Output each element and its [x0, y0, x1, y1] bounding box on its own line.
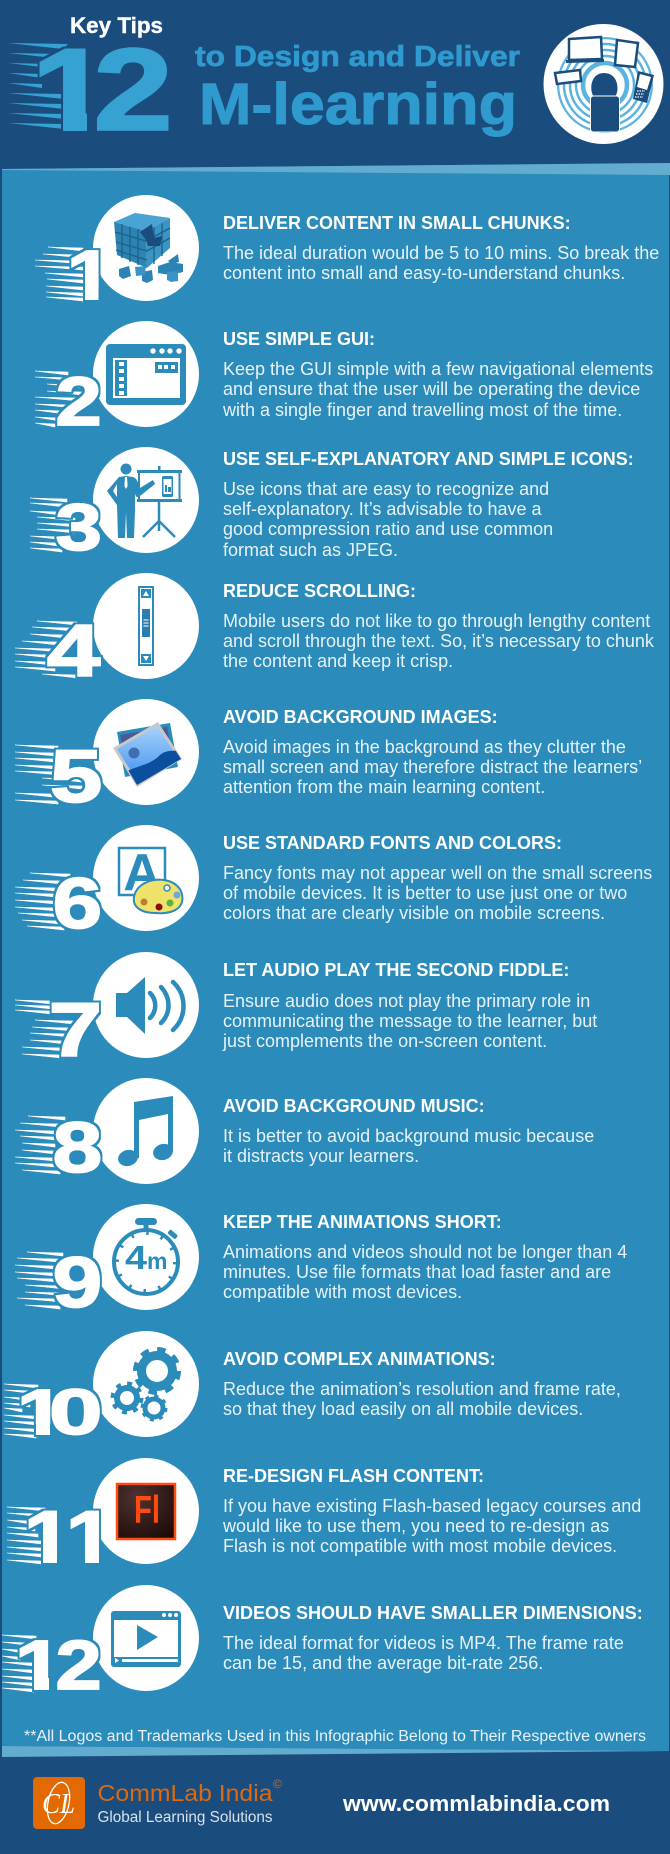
- number 6: 6: [53, 865, 102, 944]
- speed lines 12: [2, 1635, 36, 1692]
- tip 5: [15, 699, 641, 805]
- tip 11: [7, 1458, 640, 1564]
- heading 7: LET AUDIO PLAY THE SECOND FIDDLE:: [223, 960, 569, 980]
- icon: Flash logo: Fl: [134, 1489, 160, 1532]
- heading numeral 12: 2: [94, 24, 173, 155]
- speed lines 7: [15, 1000, 74, 1058]
- text 4: the content and keep it crisp.: [223, 651, 453, 671]
- heading numeral 12: 1: [31, 24, 111, 155]
- text 10: so that they load easily on all mobile devices.: [223, 1399, 583, 1419]
- number 1: 1: [67, 236, 113, 314]
- tip 3: [30, 447, 634, 564]
- laptop: [566, 37, 604, 63]
- heading 4: REDUCE SCROLLING:: [223, 581, 416, 601]
- heading numeral 12: [38, 46, 168, 131]
- icon: cube of blocks: [114, 213, 183, 283]
- icon: learner with devices: [544, 24, 664, 144]
- icon: stopwatch 4m: [114, 1218, 178, 1294]
- disclaimer note: **All Logos and Trademarks Used in this Infographic Belong to Their Respective owners: [24, 1728, 646, 1745]
- icon circle 4: [93, 573, 199, 679]
- text 12: The ideal format for videos is MP4. The frame rate: [223, 1633, 624, 1653]
- icon circle 7: [93, 952, 199, 1058]
- text 4: Mobile users do not like to go through lengthy content: [223, 611, 650, 631]
- text 7: Ensure audio does not play the primary role in: [223, 991, 590, 1011]
- number 9: 9: [53, 1244, 102, 1323]
- text 5: attention from the main learning content.: [223, 777, 545, 797]
- icon circle 3: [93, 447, 199, 553]
- speed lines 4: [15, 621, 78, 678]
- icon circle 12: [93, 1585, 199, 1691]
- heading 10: AVOID COMPLEX ANIMATIONS:: [223, 1349, 496, 1369]
- icon: gears: [112, 1350, 178, 1420]
- speed lines 1: [35, 247, 83, 301]
- heading 9: KEEP THE ANIMATIONS SHORT:: [223, 1212, 502, 1232]
- icon circle 6: [93, 825, 199, 931]
- heading 3: USE SELF-EXPLANATORY AND SIMPLE ICONS:: [223, 449, 634, 469]
- text 3: format such as JPEG.: [223, 540, 398, 560]
- tip 7: [15, 952, 597, 1073]
- icon: letter A with palette: [119, 844, 182, 913]
- number 12: 1: [15, 1626, 63, 1704]
- text 2: Keep the GUI simple with a few navigational elements: [223, 359, 653, 379]
- text 3: good compression ratio and use common: [223, 519, 553, 539]
- icon: stopwatch 4m: m: [147, 1248, 167, 1274]
- keypad phone: [633, 71, 654, 103]
- icon circle 10: [93, 1331, 199, 1437]
- icon: stacked pictures: [113, 722, 182, 787]
- brand name: CommLab India: [98, 1780, 273, 1806]
- heading 5: AVOID BACKGROUND IMAGES:: [223, 707, 498, 727]
- footer: [33, 1777, 610, 1829]
- icon: stopwatch 4m: 4: [125, 1239, 148, 1276]
- number 1: [69, 248, 101, 302]
- heading: M-learning: M-learning: [199, 72, 517, 137]
- text 11: If you have existing Flash-based legacy courses and: [223, 1496, 641, 1516]
- number 11: 1: [24, 1496, 72, 1578]
- small tablet: [555, 70, 581, 84]
- speed lines 6: [15, 873, 70, 930]
- text 10: Reduce the animation’s resolution and frame rate,: [223, 1379, 621, 1399]
- text 2: and ensure that the user will be operating the device: [223, 379, 640, 399]
- icon circle 8: [93, 1078, 199, 1184]
- icon: music notes: [116, 1096, 175, 1168]
- tablet: [615, 40, 638, 67]
- speed lines 2: [35, 371, 82, 427]
- number 12: 2: [56, 1626, 102, 1704]
- icon: Flash logo: [117, 1484, 175, 1539]
- icon: video player: [111, 1611, 181, 1667]
- text 8: it distracts your learners.: [223, 1146, 419, 1166]
- tip 9: [15, 1204, 627, 1323]
- speed lines 9: [15, 1252, 66, 1309]
- number 10: 0: [49, 1377, 102, 1448]
- number 2: 2: [56, 364, 102, 440]
- text 4: and scroll through the text. So, it’s necessary to chunk: [223, 631, 655, 651]
- icon circle 11: [93, 1458, 199, 1564]
- icon circle 5: [93, 699, 199, 805]
- text 6: colors that are clearly visible on mobile screens.: [223, 903, 605, 923]
- text 8: It is better to avoid background music because: [223, 1126, 594, 1146]
- number 5: 5: [50, 735, 102, 818]
- text 12: can be 15, and the average bit-rate 256.: [223, 1653, 543, 1673]
- speed lines: header: [8, 43, 68, 129]
- text 2: with a single finger and travelling most of the time.: [222, 400, 622, 420]
- speed lines 10: [4, 1384, 38, 1438]
- text 6: Fancy fonts may not appear well on the small screens: [223, 863, 652, 883]
- number 4: 4: [47, 611, 100, 692]
- heading 12: VIDEOS SHOULD HAVE SMALLER DIMENSIONS:: [223, 1603, 643, 1623]
- text 1: The ideal duration would be 5 to 10 mins. So break the: [223, 243, 659, 263]
- speed lines 5: [15, 745, 82, 804]
- icon: presenter with board: [107, 464, 182, 538]
- icon circle 1: [93, 195, 199, 301]
- tip 2: [35, 321, 653, 440]
- icon: scroll bar: [139, 587, 153, 665]
- icon circle 9: [93, 1204, 199, 1310]
- number 11: 1: [66, 1496, 114, 1578]
- band: bottom light wedge: [2, 1746, 670, 1757]
- tip 4: [15, 573, 655, 692]
- text 6: of mobile devices. It is better to use just one or two: [223, 883, 627, 903]
- text 11: would like to use them, you need to re-design as: [222, 1516, 609, 1536]
- heading 8: AVOID BACKGROUND MUSIC:: [223, 1096, 485, 1116]
- number 7: 7: [49, 988, 102, 1073]
- heading: to Design and Deliver: to Design and Deliver: [195, 41, 520, 73]
- icon: GUI window: [106, 344, 186, 405]
- speed lines 11: [7, 1507, 45, 1564]
- heading 2: USE SIMPLE GUI:: [223, 329, 375, 349]
- number 11: [26, 1508, 101, 1564]
- tip 6: [15, 825, 652, 944]
- text 3: self-explanatory. It’s advisable to have a: [223, 499, 543, 519]
- heading 1: DELIVER CONTENT IN SMALL CHUNKS:: [223, 213, 571, 233]
- text 7: communicating the message to the learner, but: [223, 1011, 597, 1031]
- icon: speaker: [116, 977, 184, 1034]
- speed lines 3: [30, 498, 75, 552]
- text 7: just complements the on-screen content.: [222, 1031, 547, 1051]
- tip 8: [15, 1078, 594, 1188]
- text 1: content into small and easy-to-understand chunks.: [223, 263, 625, 283]
- tip 1: [35, 195, 658, 302]
- website url: www.commlabindia.com: [342, 1791, 610, 1816]
- tagline: Global Learning Solutions: [98, 1809, 273, 1826]
- text 11: Flash is not compatible with most mobile devices.: [223, 1536, 617, 1556]
- text 9: minutes. Use file formats that load faster and are: [223, 1262, 611, 1282]
- logo: CommLab CL mark: CL: [42, 1789, 75, 1820]
- number 8: 8: [53, 1109, 102, 1188]
- heading 11: RE-DESIGN FLASH CONTENT:: [223, 1466, 484, 1486]
- number 3: 3: [56, 490, 102, 564]
- text 9: Animations and videos should not be longer than 4: [223, 1242, 627, 1262]
- number 12: [18, 1638, 100, 1692]
- icon: letter A with palette: A: [123, 844, 161, 902]
- text 3: Use icons that are easy to recognize and: [223, 479, 549, 499]
- heading: Key Tips: Key Tips: [70, 13, 163, 38]
- icon circle 2: [93, 321, 199, 427]
- number 10: 1: [17, 1377, 65, 1448]
- text 5: Avoid images in the background as they clutter the: [223, 737, 626, 757]
- speed lines 8: [15, 1116, 65, 1174]
- tip 10: [4, 1331, 621, 1448]
- band: top light wedge: [2, 163, 670, 175]
- number 10: [20, 1387, 102, 1437]
- tip 12: [2, 1585, 642, 1692]
- text 9: compatible with most devices.: [223, 1282, 462, 1302]
- logo: CommLab CL mark: [33, 1777, 85, 1829]
- text 5: small screen and may therefore distract the learners’: [223, 757, 642, 777]
- heading 6: USE STANDARD FONTS AND COLORS:: [223, 833, 562, 853]
- header: [8, 13, 664, 155]
- copyright mark: ©: [273, 1777, 282, 1791]
